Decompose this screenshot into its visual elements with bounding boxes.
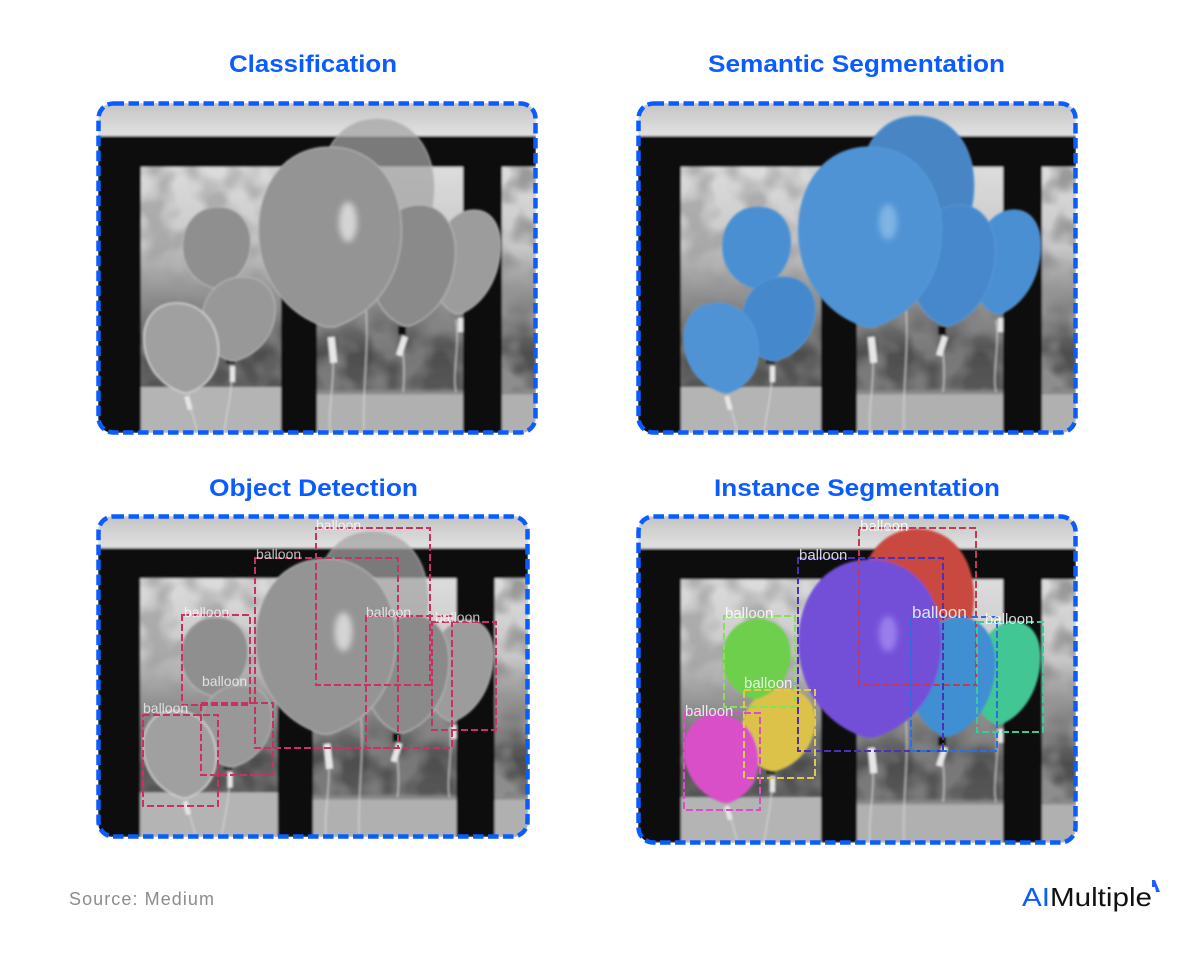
logo: AIMultiple: AIMultiple xyxy=(1022,882,1152,912)
balloon labels: balloon xyxy=(256,546,301,562)
balloon labels: balloon xyxy=(799,547,847,564)
coloured balloon masks xyxy=(680,529,1047,803)
dashed frame xyxy=(638,104,1076,432)
panel: semantic segmentation photo xyxy=(638,103,1076,433)
balloon labels: balloon xyxy=(912,603,967,622)
balloon labels: balloon xyxy=(860,518,908,535)
detection boxes xyxy=(143,528,496,806)
title: Object Detection: Object Detection xyxy=(209,475,418,502)
panel: instance segmentation photo xyxy=(638,516,1076,843)
icon: logo spark xyxy=(1152,880,1160,892)
panel: classification photo xyxy=(98,103,536,433)
dashed frame xyxy=(638,516,1076,842)
title: Classification: Classification xyxy=(229,51,397,78)
balloon labels: balloon xyxy=(202,673,247,689)
balloon labels xyxy=(685,518,1033,720)
grey balloons xyxy=(139,532,500,798)
balloon labels: balloon xyxy=(143,700,188,716)
balloon labels xyxy=(143,517,480,716)
balloon labels: balloon xyxy=(985,611,1033,628)
balloon labels: balloon xyxy=(366,604,411,620)
source note: Source: Medium xyxy=(69,889,214,909)
balloon labels: balloon xyxy=(725,605,773,622)
balloon labels: balloon xyxy=(316,517,361,533)
title: Instance Segmentation: Instance Segmentation xyxy=(714,475,1000,502)
balloon labels: balloon xyxy=(435,609,480,625)
blue balloon masks xyxy=(680,116,1047,393)
instance boxes xyxy=(684,528,1043,810)
balloon labels: balloon xyxy=(184,604,229,620)
dashed frame xyxy=(98,516,528,836)
dashed frame xyxy=(98,104,536,432)
balloon labels: balloon xyxy=(685,703,733,720)
grey balloons xyxy=(140,119,507,393)
title: Semantic Segmentation: Semantic Segmentation xyxy=(708,51,1005,78)
panel: object detection photo xyxy=(98,516,528,837)
balloon labels: balloon xyxy=(744,675,792,692)
